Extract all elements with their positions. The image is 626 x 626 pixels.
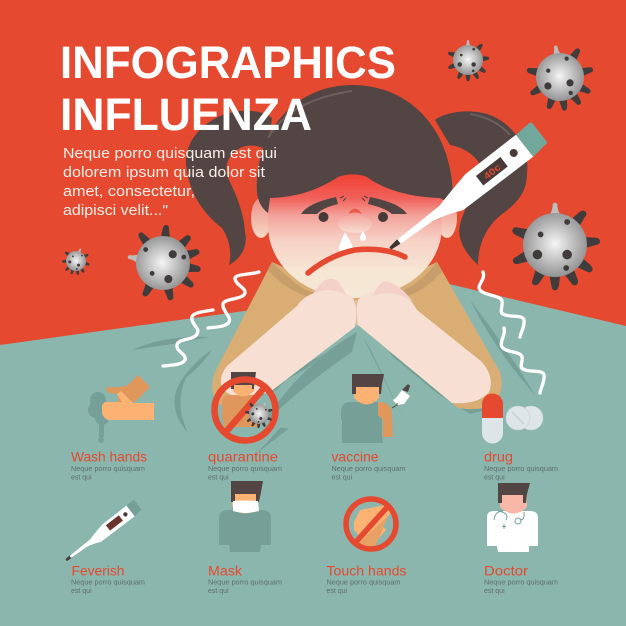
snot drops	[339, 232, 353, 255]
virus large right	[511, 202, 601, 290]
face	[268, 170, 442, 298]
eyes	[318, 212, 328, 222]
intro paragraph: Neque porro quisquam est qui	[63, 145, 277, 162]
icon: drug	[482, 394, 543, 444]
label: doctor: Neque porro quisquam	[484, 580, 558, 586]
label: drug: Neque porro quisquam	[484, 466, 558, 473]
label: quarantine: Neque porro quisquam	[208, 466, 282, 473]
fingers	[313, 279, 413, 302]
main hair	[257, 85, 453, 213]
label: mask: Mask	[208, 562, 243, 578]
label: doctor: Doctor	[484, 562, 528, 578]
label: mask: Neque porro quisquam	[208, 580, 282, 586]
nose	[338, 215, 372, 233]
label: doctor: est qui	[484, 588, 505, 595]
left pigtail	[186, 111, 272, 265]
shirt fold under arms	[262, 332, 404, 425]
tan cardigan	[212, 262, 502, 412]
virus left	[121, 219, 207, 306]
label: feverish: est qui	[71, 588, 92, 595]
label: doctor	[484, 562, 558, 595]
label: feverish: Feverish	[72, 562, 124, 578]
chin gap	[348, 298, 364, 312]
arm gap	[356, 300, 357, 326]
label: wash hands: est qui	[71, 474, 92, 482]
right pigtail	[435, 111, 527, 265]
icon: doctor	[487, 483, 538, 552]
label: vaccine: est qui	[332, 474, 353, 482]
label: feverish: Neque porro quisquam	[71, 580, 145, 586]
label: wash hands: Wash hands	[71, 448, 147, 464]
hair highlights	[268, 91, 352, 138]
mouth	[308, 249, 405, 273]
icon: small thermometer	[62, 499, 142, 566]
label: drug: drug	[484, 448, 513, 464]
big thermometer	[382, 122, 549, 261]
virus small left	[58, 244, 94, 279]
label: quarantine: est qui	[208, 474, 229, 482]
label: quarantine	[208, 448, 282, 482]
label: touch hands: est qui	[326, 588, 348, 595]
label: quarantine: quarantine	[208, 448, 278, 464]
title: INFOGRAPHICS	[60, 37, 396, 88]
icon: touch hands	[346, 499, 396, 549]
squiggles	[163, 272, 544, 393]
label: wash hands: Neque porro quisquam	[71, 466, 145, 473]
label: feverish	[71, 562, 145, 595]
label: mask: est qui	[208, 588, 229, 595]
label: wash hands	[71, 448, 147, 482]
collar shadow	[268, 262, 442, 300]
label: mask	[208, 562, 282, 595]
title	[60, 37, 396, 140]
icon: vaccine	[341, 374, 410, 443]
label: vaccine: Neque porro quisquam	[332, 466, 406, 473]
label: drug	[484, 448, 558, 482]
big thermometer: 40c	[482, 162, 503, 181]
intro paragraph: dolorem ipsum quia dolor sit	[63, 164, 266, 181]
label: drug: est qui	[484, 474, 505, 482]
right arm	[356, 290, 491, 403]
worry lines	[340, 196, 368, 201]
icon: wash hands	[88, 375, 154, 443]
ears	[251, 198, 271, 238]
background: teal lower panel	[0, 283, 626, 626]
woman figure	[186, 85, 527, 440]
label: touch hands: Touch hands	[326, 562, 406, 578]
label: vaccine	[332, 448, 406, 482]
left arm	[221, 290, 356, 397]
virus large top right	[523, 41, 599, 115]
intro paragraph: adipisci velit..."	[63, 202, 168, 219]
label: vaccine: vaccine	[332, 448, 379, 464]
intro paragraph: amet, consectetur,	[63, 183, 195, 200]
intro paragraph	[63, 145, 277, 219]
shirt folds	[132, 300, 535, 453]
icon: mask person	[219, 481, 271, 552]
virus small top	[447, 40, 489, 81]
teal shirt V	[240, 327, 470, 440]
eyebrows	[301, 197, 407, 214]
label: touch hands	[326, 562, 406, 595]
title: INFLUENZA	[60, 89, 312, 140]
label: touch hands: Neque porro quisquam	[326, 580, 401, 586]
icon: quarantine	[214, 372, 278, 440]
